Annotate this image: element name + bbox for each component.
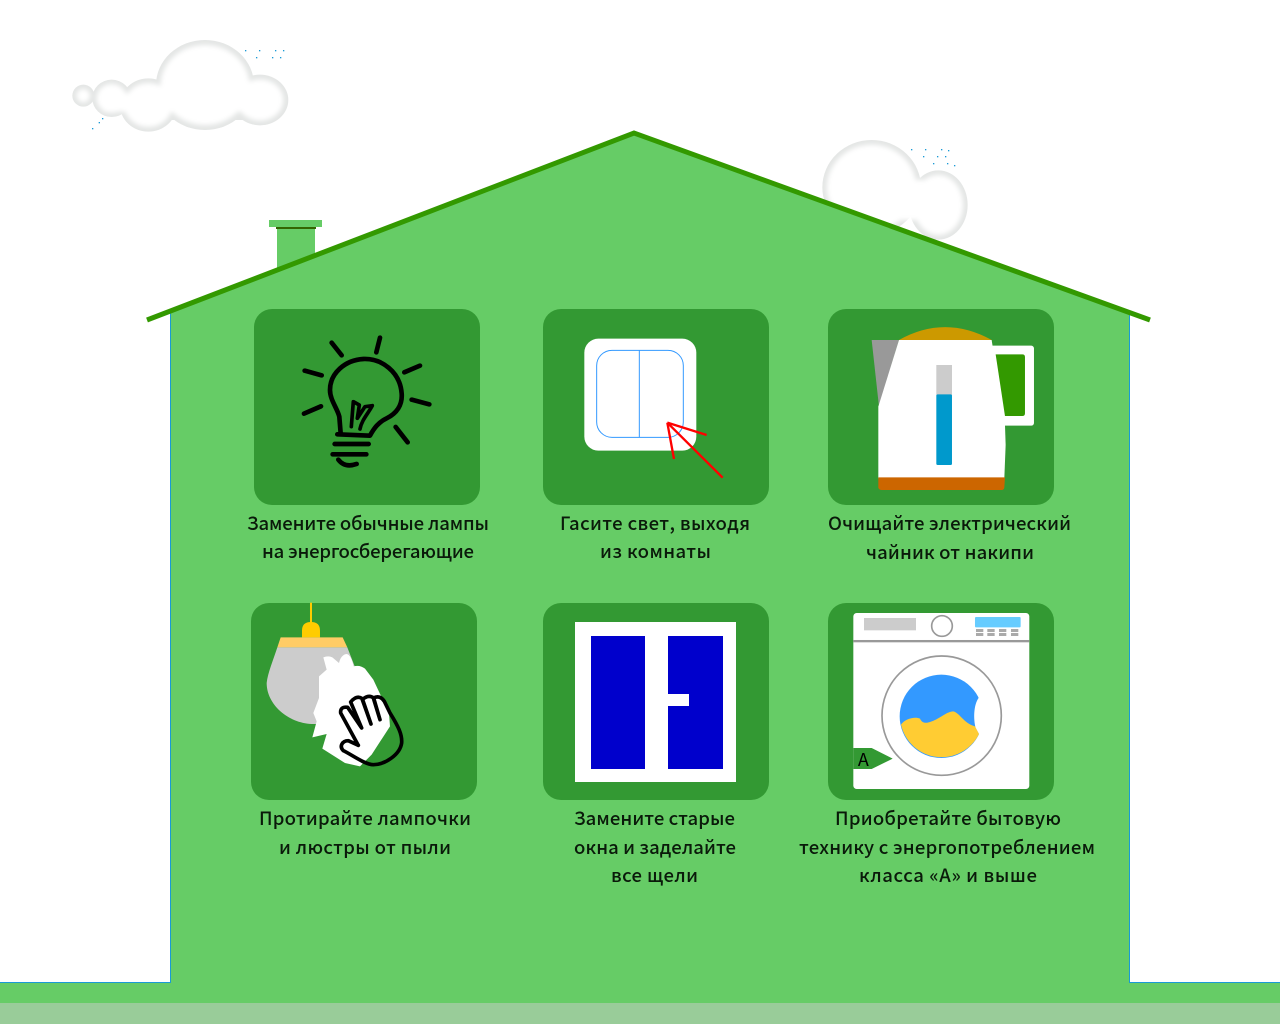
caption: window: окна и заделайте — [574, 834, 736, 860]
panel: light bulb — [254, 309, 480, 505]
caption: appliances: Приобретайте бытовую — [835, 805, 1061, 831]
chimney — [269, 220, 322, 288]
icon: lamp and hand — [267, 603, 402, 766]
caption: appliances: класса «А» и выше — [859, 862, 1037, 888]
caption: switch — [560, 510, 750, 564]
caption: appliances: технику с энергопотреблением — [799, 834, 1095, 860]
energy class tag — [853, 746, 893, 772]
roof — [147, 133, 1150, 320]
icon: washing machine — [853, 613, 1029, 789]
ground — [0, 982, 1280, 1024]
icon: kettle — [872, 327, 1034, 490]
icon: light switch — [584, 339, 723, 478]
caption: switch: Гасите свет, выходя — [560, 510, 750, 536]
caption: window: все щели — [611, 862, 698, 888]
cloud: right behind roof — [822, 140, 968, 240]
caption: lamps: Замените обычные лампы — [247, 510, 489, 536]
caption: kettle — [828, 510, 1071, 565]
energy class tag: A — [858, 746, 869, 772]
caption: window — [574, 805, 736, 888]
panel: kettle — [828, 309, 1054, 505]
caption: lamps: на энергосберегающие — [262, 538, 474, 564]
caption: dust — [259, 805, 471, 860]
house body — [170, 133, 1130, 984]
icon: window — [575, 622, 736, 782]
panel: washing machine — [828, 603, 1054, 800]
caption: switch: из комнаты — [600, 538, 711, 564]
panel: light switch — [543, 309, 769, 505]
caption: appliances — [799, 805, 1095, 888]
panel: window — [543, 603, 769, 800]
caption: kettle: Очищайте электрический — [828, 510, 1071, 536]
caption: window: Замените старые — [574, 805, 735, 831]
caption: kettle: чайник от накипи — [866, 539, 1034, 565]
icon: light bulb — [304, 338, 429, 465]
icon: red arrow — [667, 423, 723, 478]
caption: dust: и люстры от пыли — [279, 834, 451, 860]
panel: lamp cleaning — [251, 603, 477, 800]
caption: dust: Протирайте лампочки — [259, 805, 471, 831]
caption: lamps — [247, 510, 489, 564]
cloud: left — [72, 40, 288, 132]
